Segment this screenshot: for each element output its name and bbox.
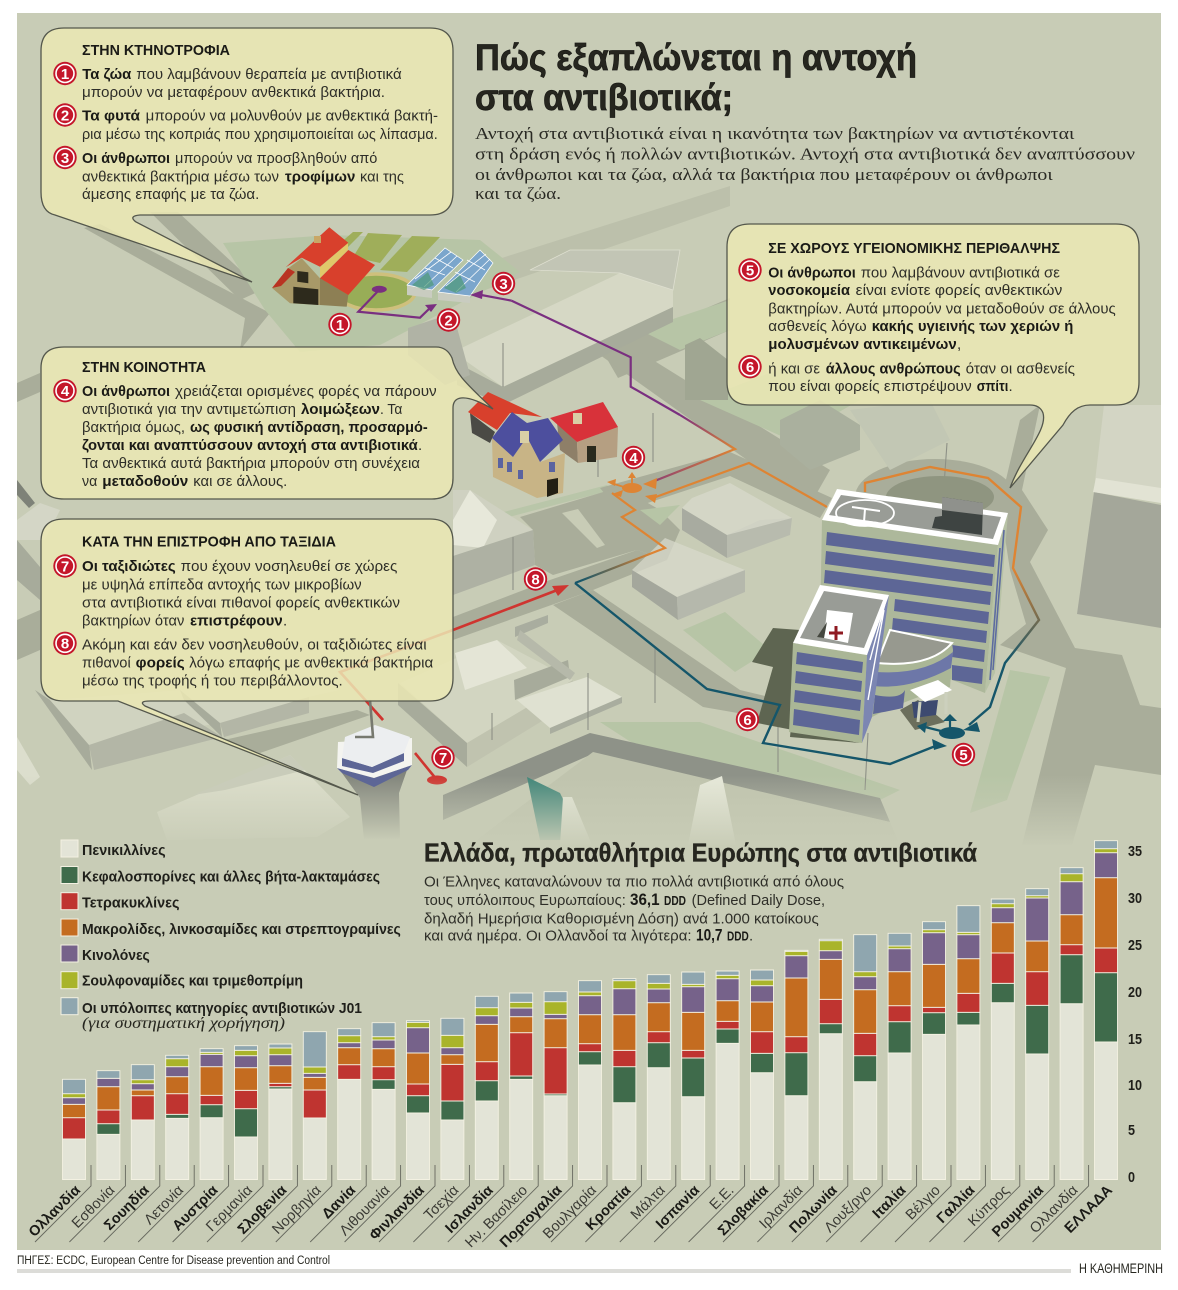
marker 3	[492, 272, 515, 295]
heading: community: ΣΤΗΝ ΚΟΙΝΟΤΗΤΑ	[82, 359, 206, 376]
bar: Νορβηγία	[303, 1032, 326, 1180]
bar: Εσθονία	[97, 1071, 120, 1180]
country labels: Λετονία	[141, 1183, 187, 1228]
path: around hospital to hub 5	[865, 467, 1039, 732]
bar: Γαλλία	[957, 906, 980, 1180]
title: Πώς εξαπλώνεται η αντοχή	[475, 37, 917, 78]
intro text: στη δράση ενός ή πολλών αντιβιοτικών. Αντοχή στα αντιβιοτικά δεν αναπτύσσουν	[475, 144, 1135, 164]
icon: hospital	[752, 476, 1008, 743]
marker 4	[622, 446, 645, 469]
chart description: .	[749, 928, 753, 945]
chart axis values: 20	[1128, 984, 1142, 1001]
number 1	[53, 62, 77, 85]
intro text: Αντοχή στα αντιβιοτικά είναι η ικανότητα των βακτηρίων να αντιστέκονται	[475, 124, 1075, 143]
text block: items 5-6	[768, 264, 1116, 395]
chart description: DDD	[664, 893, 686, 908]
country labels: Νορβηγία	[269, 1183, 325, 1238]
text block: item 4: λοιμώξεων	[301, 401, 380, 418]
text block: items 5-6: βακτηρίων. Αυτά μπορούν να μεταδοθούν σε άλλους	[768, 300, 1116, 317]
country labels: Κύπρος	[965, 1183, 1013, 1230]
chart description: Οι Έλληνες καταναλώνουν τα πιο πολλά αντιβιοτικά από όλους	[424, 874, 844, 891]
country labels: Αυστρία	[170, 1182, 221, 1234]
text block: items 7-8	[82, 558, 434, 689]
chart axis values: 15	[1128, 1031, 1142, 1048]
number 2	[53, 103, 77, 127]
country labels: Δανία	[319, 1182, 359, 1222]
path: hospital to community (orange)	[575, 463, 827, 583]
bar: Λουξ/ργο	[854, 935, 877, 1180]
country labels: Λουξ/ργο	[821, 1183, 875, 1236]
bar: ΕΛΛΑΔΑ	[1094, 841, 1118, 1180]
bar: Ε.Ε.	[716, 971, 739, 1180]
text block: items 5-6: ή και σε	[768, 360, 820, 377]
number 3: 3	[61, 150, 69, 167]
text block: items 5-6: κακής υγιεινής των χεριών ή	[872, 318, 1073, 335]
panel: community callout	[41, 347, 493, 499]
intro text	[475, 124, 1135, 203]
number 6: 6	[746, 359, 754, 376]
marker 5	[952, 743, 975, 766]
country labels: Σλοβενία	[235, 1182, 290, 1238]
country labels: Φινλανδία	[367, 1182, 428, 1244]
country labels	[26, 1182, 1116, 1251]
text block: item 4: Οι άνθρωποι	[82, 383, 170, 400]
text block: items 5-6: .	[1008, 378, 1013, 395]
number 6	[738, 355, 762, 378]
text block: items 1-3: μπορούν να προσβληθούν από	[175, 150, 377, 167]
text block: item 4: αντιβιοτικά για την αντιμετώπιση	[82, 401, 296, 418]
panel: healthcare callout	[727, 224, 1139, 488]
chart axis values: 35	[1128, 843, 1142, 860]
text block: items 1-3: Οι άνθρωποι	[82, 150, 170, 167]
bar: Σλοβενία	[269, 1044, 292, 1180]
country labels: Ισλανδία	[442, 1182, 497, 1237]
text block: items 1-3: που λαμβάνουν θεραπεία με αντιβιοτικά	[136, 66, 402, 83]
text block: item 4: και σε άλλους.	[193, 473, 287, 490]
legend: quinolones: Κινολόνες	[82, 947, 150, 964]
legend: other J01	[61, 998, 362, 1032]
bar: Ιρλανδία	[785, 950, 808, 1180]
marker 5: 5	[959, 747, 968, 764]
text block: items 7-8: πιθανοί	[82, 654, 131, 671]
text block: items 1-3: άμεσης επαφής με τα ζώα.	[82, 186, 259, 203]
chart description: τους υπόλοιπους Ευρωπαίους:	[424, 892, 626, 909]
country labels: Λιθουανία	[337, 1183, 393, 1239]
heading: healthcare: ΣΕ ΧΩΡΟΥΣ ΥΓΕΙΟΝΟΜΙΚΗΣ ΠΕΡΙΘΑΛΨΗΣ	[768, 240, 1060, 257]
legend: quinolones	[61, 945, 150, 964]
text block: items 5-6: σπίτι	[977, 378, 1008, 395]
legend: sulfonamides: Σουλφοναμίδες και τριμεθοπρίμη	[82, 973, 303, 990]
bar: Βουλγαρία	[578, 981, 602, 1180]
country labels: Ισπανία	[653, 1182, 703, 1232]
bar: Κροατία	[613, 979, 636, 1180]
number 5	[738, 258, 762, 282]
text block: items 7-8: βακτηρίων όταν	[82, 612, 184, 629]
text block: item 4: . Τα	[380, 401, 403, 418]
legend: other J01: (για συστηματική χορήγηση)	[82, 1015, 285, 1032]
text block: items 5-6: ,	[957, 336, 961, 353]
chart description: και ανά ημέρα. Οι Ολλανδοί τα λιγότερα:	[424, 928, 692, 945]
country labels: Εσθονία	[69, 1183, 118, 1232]
marker 6: 6	[743, 712, 752, 729]
text block: items 5-6: Οι άνθρωποι	[768, 264, 856, 281]
icon: greenhouses	[407, 248, 493, 303]
marker 1: 1	[336, 317, 344, 334]
text block: items 1-3: ρια μέσω της κοπριάς που χρησιμοποιείται ως λίπασμα.	[82, 126, 438, 143]
number 3	[53, 146, 77, 169]
text block: items 7-8: φορείς	[136, 654, 185, 671]
text block: items 5-6: που είναι φορείς επιστρέψουν	[768, 378, 972, 395]
text block: items 1-3: και της	[360, 168, 404, 186]
text block: items 1-3: Τα φυτά	[82, 108, 141, 124]
path: farm to community (purple and orange)	[358, 290, 735, 489]
heading: livestock: ΣΤΗΝ ΚΤΗΝΟΤΡΟΦΙΑ	[82, 42, 230, 59]
chart description: 10,7	[696, 926, 722, 945]
number 5: 5	[746, 262, 754, 279]
text block: items 1-3: μπορούν να μεταφέρουν ανθεκτικά βακτήρια.	[82, 84, 385, 101]
heading: travel: ΚΑΤΑ ΤΗΝ ΕΠΙΣΤΡΟΦΗ ΑΠΟ ΤΑΞΙΔΙΑ	[82, 534, 336, 551]
text block: items 7-8: .	[283, 612, 287, 629]
path: community to hospital (teal)	[575, 583, 947, 764]
marker 2	[437, 308, 460, 332]
text block: items 7-8: επιστρέφουν	[190, 612, 283, 629]
country labels: Ιρλανδία	[756, 1183, 806, 1232]
bar: Σουηδία	[131, 1065, 154, 1180]
number 7: 7	[61, 558, 69, 575]
source note: ΠΗΓΕΣ: ECDC, European Centre for Disease prevention and Control	[17, 1255, 330, 1267]
panel: livestock callout	[41, 28, 453, 282]
bar: Αυστρία	[200, 1049, 223, 1180]
bar: Ρουμανία	[1026, 889, 1049, 1180]
bar: Λιθουανία	[372, 1023, 395, 1180]
text block: items 1-3: τροφίμων	[285, 168, 355, 186]
text block: item 4: να	[82, 473, 98, 490]
number 8: 8	[61, 636, 69, 653]
ghost houses	[632, 483, 792, 620]
chart description	[424, 874, 844, 945]
title	[475, 37, 917, 118]
text block: items 7-8: Ακόμη και εάν δεν νοσηλευθούν, οι ταξιδιώτες είναι	[82, 636, 427, 653]
text block: items 5-6: νοσοκομεία	[768, 282, 851, 299]
legend: macrolides: Μακρολίδες, λινκοσαμίδες και στρεπτογραμίνες	[82, 921, 401, 938]
country labels: Πολωνία	[787, 1182, 841, 1237]
chart axis values: 30	[1128, 890, 1142, 907]
text block: items 5-6: άλλους ανθρώπους	[826, 360, 961, 377]
chart axis values: 10	[1128, 1077, 1142, 1094]
title: στα αντιβιοτικά;	[475, 77, 733, 118]
bar: Ισλανδία	[475, 996, 498, 1180]
marker 7: 7	[439, 750, 447, 767]
icon: airplane tail	[527, 776, 736, 845]
panel: travel callout	[41, 519, 453, 795]
text block: items 7-8: στα αντιβιοτικά είναι πιθανοί φορείς ανθεκτικών	[82, 594, 400, 611]
bar: Ολλανδία	[62, 1079, 86, 1180]
marker 4: 4	[629, 450, 638, 467]
chart description: DDD	[727, 929, 749, 944]
hub 4 orange	[607, 472, 642, 497]
text block: items 7-8: μέσω της τροφής ή του περιβάλλοντος.	[82, 672, 343, 689]
bar: Ιταλία	[888, 933, 911, 1180]
chart axis values: 5	[1128, 1122, 1135, 1139]
text block: items 1-3: ανθεκτικά βακτήρια μέσω των	[82, 168, 279, 186]
text block: items 5-6: είναι ενίοτε φορείς ανθεκτικών	[856, 282, 1062, 299]
text block: items 5-6: που λαμβάνουν αντιβιοτικά σε	[861, 264, 1060, 281]
country labels: Σλοβακία	[715, 1182, 772, 1239]
bar: Βέλγιο	[922, 922, 946, 1180]
legend	[61, 840, 401, 1032]
marker 6	[736, 708, 759, 731]
fade over map bottom	[17, 775, 1161, 847]
bar: Τσεχία	[441, 1018, 464, 1180]
bar: Γερμανία	[234, 1046, 258, 1180]
chart axis values: 0	[1128, 1169, 1135, 1186]
country labels: Ιταλία	[870, 1182, 909, 1222]
text block: items 7-8: λόγω επαφής με ανθεκτικά βακτήρια	[189, 654, 434, 671]
country labels: Ολλανδία	[26, 1182, 84, 1240]
legend: penicillins: Πενικιλλίνες	[82, 842, 166, 859]
text block: items 1-3: Τα ζώα	[82, 66, 132, 83]
bar: Μάλτα	[647, 975, 670, 1180]
text block: items 7-8: με υψηλά επίπεδα αντοχής των μικροβίων	[82, 576, 362, 593]
text block: items 5-6: μολυσμένων αντικειμένων	[768, 336, 957, 353]
path: travel red arrow	[340, 585, 569, 784]
country tick lines	[35, 1165, 1089, 1242]
lamp posts	[492, 343, 947, 790]
marker 7	[431, 746, 455, 769]
text block: items 1-3: μπορούν να μολυνθούν με ανθεκτικά βακτή-	[146, 108, 438, 124]
chart axis values: 25	[1128, 937, 1142, 954]
country labels: Τσεχία	[421, 1183, 462, 1223]
text block: items 1-3	[82, 66, 438, 203]
number 2: 2	[61, 107, 69, 124]
map: city ground, roads and blocks	[17, 186, 1161, 845]
bar: Ολλανδία (2)	[1060, 868, 1083, 1180]
country labels: Ην. Βασίλειο	[462, 1183, 531, 1251]
country labels: ΕΛΛΑΔΑ	[1062, 1182, 1116, 1237]
chart heading: Ελλάδα, πρωταθλήτρια Ευρώπης στα αντιβιοτικά	[424, 838, 977, 868]
intro text: οι άνθρωποι και τα ζώα, αλλά τα βακτήρια που μεταφέρουν οι άνθρωποι	[475, 165, 1053, 184]
legend: other J01: Οι υπόλοιπες κατηγορίες αντιβιοτικών J01	[82, 1000, 362, 1017]
bar: Λετονία	[166, 1055, 189, 1180]
icon: control tower	[337, 700, 412, 840]
number 7	[53, 554, 77, 578]
country labels: Σουηδία	[101, 1182, 153, 1234]
number 4	[53, 379, 77, 402]
text block: item 4	[82, 383, 437, 490]
icon: houses	[468, 392, 618, 498]
marker 8	[524, 567, 547, 591]
country labels: Κροατία	[583, 1182, 634, 1234]
text block: items 7-8: που έχουν νοσηλευθεί σε χώρες	[181, 558, 397, 575]
country labels: Ε.Ε.	[707, 1183, 737, 1213]
country labels: Βουλγαρία	[540, 1183, 600, 1242]
text block: item 4: χρειάζεται ορισμένες φορές να πάρουν	[175, 383, 437, 400]
marker 1	[328, 313, 352, 336]
stacked bar chart	[62, 841, 1118, 1180]
bar: Κύπρος	[991, 899, 1014, 1180]
hub 5 teal	[917, 714, 965, 739]
bar: Πορτογαλία	[544, 992, 567, 1180]
country labels: Γαλλία	[934, 1182, 978, 1227]
intro text: και τα ζώα.	[475, 184, 561, 203]
chart axis values	[1128, 843, 1142, 1186]
country labels: Πορτογαλία	[497, 1182, 565, 1251]
number 1: 1	[61, 66, 69, 83]
text block: items 7-8: Οι ταξιδιώτες	[82, 558, 176, 575]
chart description: δηλαδή Ημερήσια Καθορισμένη Δόση) ανά 1.000 κατοίκους	[424, 910, 819, 927]
number 4: 4	[61, 383, 70, 400]
icon: barn with paddock	[272, 227, 415, 310]
text block: item 4: ζονται και αναπτύσσουν αντοχή στα αντιβιοτικά	[82, 437, 418, 454]
text block: item 4: .	[418, 437, 422, 454]
bar: Ην. Βασίλειο	[510, 993, 533, 1180]
text block: item 4: βακτήρια όμως,	[82, 419, 185, 436]
text block: item 4: μεταδοθούν	[102, 473, 188, 490]
text block: items 5-6: όταν οι ασθενείς	[966, 360, 1075, 377]
country labels: Γερμανία	[203, 1183, 256, 1235]
chart description: 36,1	[630, 890, 660, 909]
legend: cephalosporins: Κεφαλοσπορίνες και άλλες βήτα-λακταμάσες	[82, 869, 380, 886]
country labels: Ολλανδία	[1027, 1183, 1081, 1237]
bar: Σλοβακία	[750, 970, 774, 1180]
country labels: Μάλτα	[628, 1183, 669, 1223]
bar: Δανία	[338, 1029, 361, 1180]
text block: item 4: ως φυσική αντίδραση, προσαρμό-	[190, 419, 428, 436]
marker 3: 3	[499, 276, 508, 293]
text block: items 5-6: ασθενείς λόγω	[768, 318, 867, 335]
marker 2: 2	[444, 312, 453, 329]
legend: penicillins	[61, 840, 166, 859]
bar: Ισπανία	[682, 972, 705, 1180]
text block: item 4: Τα ανθεκτικά αυτά βακτήρια μπορούν στη συνέχεια	[82, 455, 420, 472]
map number markers	[328, 272, 975, 769]
number 8	[53, 632, 77, 655]
legend: tetracyclines: Τετρακυκλίνες	[82, 895, 180, 912]
country labels: Βέλγιο	[903, 1183, 944, 1223]
chart description: (Defined Daily Dose,	[692, 892, 825, 909]
bar: Φινλανδία	[406, 1021, 430, 1180]
country labels: Ρουμανία	[989, 1182, 1047, 1240]
marker 8: 8	[531, 571, 540, 588]
icon: farm fields	[338, 232, 440, 272]
bar: Πολωνία	[819, 939, 842, 1180]
